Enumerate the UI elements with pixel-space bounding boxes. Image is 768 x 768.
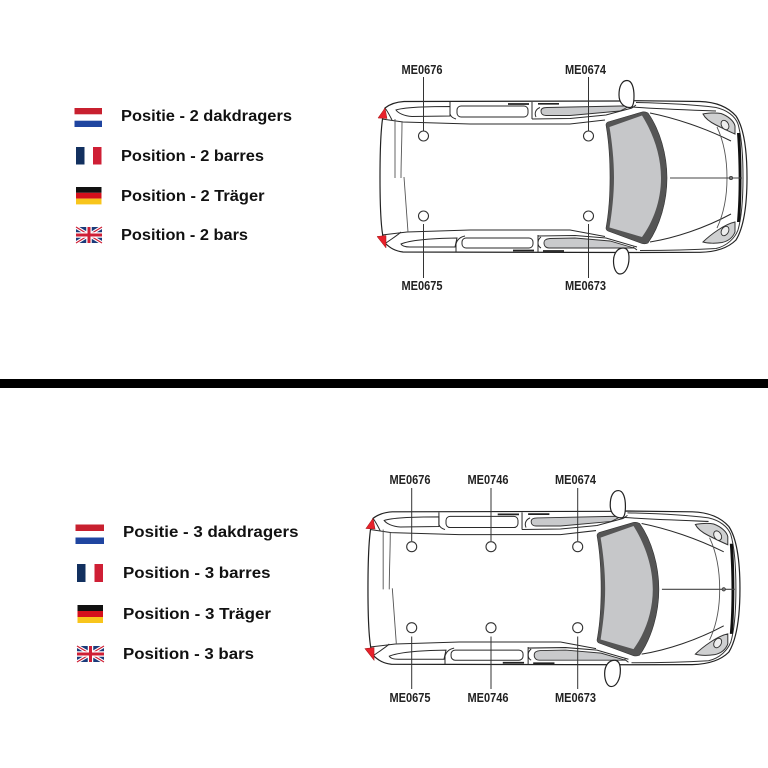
callout: ME0674 (565, 62, 607, 141)
flag: Netherlands (76, 524, 104, 544)
callout: ME0674 (555, 472, 597, 552)
label: French: Position - 3 barres (123, 565, 271, 582)
legend: 2 bars (74, 108, 292, 244)
label: Dutch: Positie - 2 dakdragers (121, 108, 292, 125)
label: German: Position - 3 Träger (123, 606, 271, 623)
label: Dutch: Positie - 3 dakdragers (123, 524, 299, 541)
diagram: van top view with 2 bars (377, 62, 747, 293)
label: German: Position - 2 Träger (121, 188, 264, 205)
callout: ME0673: ME0673 (555, 690, 596, 705)
flag: United Kingdom (77, 646, 104, 662)
callout: ME0676 (390, 472, 430, 552)
callout: ME0676: ME0676 (390, 472, 430, 487)
callout: ME0674: ME0674 (565, 62, 607, 77)
panel: two bar position (74, 62, 747, 293)
callout: ME0673 (555, 623, 596, 705)
flag: France (77, 564, 103, 582)
callout: ME0746 bottom (468, 623, 508, 705)
callout: ME0746 top: ME0746 (468, 472, 508, 487)
legend: 3 bars (76, 524, 299, 663)
van outline (365, 491, 740, 687)
flag: Netherlands (74, 108, 102, 127)
flag: France (76, 147, 102, 164)
label: English: Position - 2 bars (121, 227, 248, 244)
callout: ME0674: ME0674 (555, 472, 597, 487)
flag: Germany (78, 605, 103, 623)
van outline (377, 80, 747, 274)
callout: ME0673: ME0673 (565, 278, 606, 293)
label: English: Position - 3 bars (123, 646, 254, 663)
callout: ME0675 (390, 623, 430, 705)
flag: United Kingdom (76, 227, 102, 243)
callout: ME0746 top (468, 472, 508, 552)
flag: Germany (76, 187, 102, 204)
callout: ME0746 bottom: ME0746 (468, 690, 508, 705)
callout: ME0675 (402, 211, 442, 293)
callout: ME0676 (402, 62, 442, 141)
label: French: Position - 2 barres (121, 148, 264, 165)
panel: three bar position (76, 472, 740, 705)
callout: ME0673 (565, 211, 606, 293)
callout: ME0675: ME0675 (390, 690, 430, 705)
callout: ME0676: ME0676 (402, 62, 442, 77)
callout: ME0675: ME0675 (402, 278, 442, 293)
divider bar (0, 379, 768, 388)
diagram: van top view with 3 bars (365, 472, 740, 705)
